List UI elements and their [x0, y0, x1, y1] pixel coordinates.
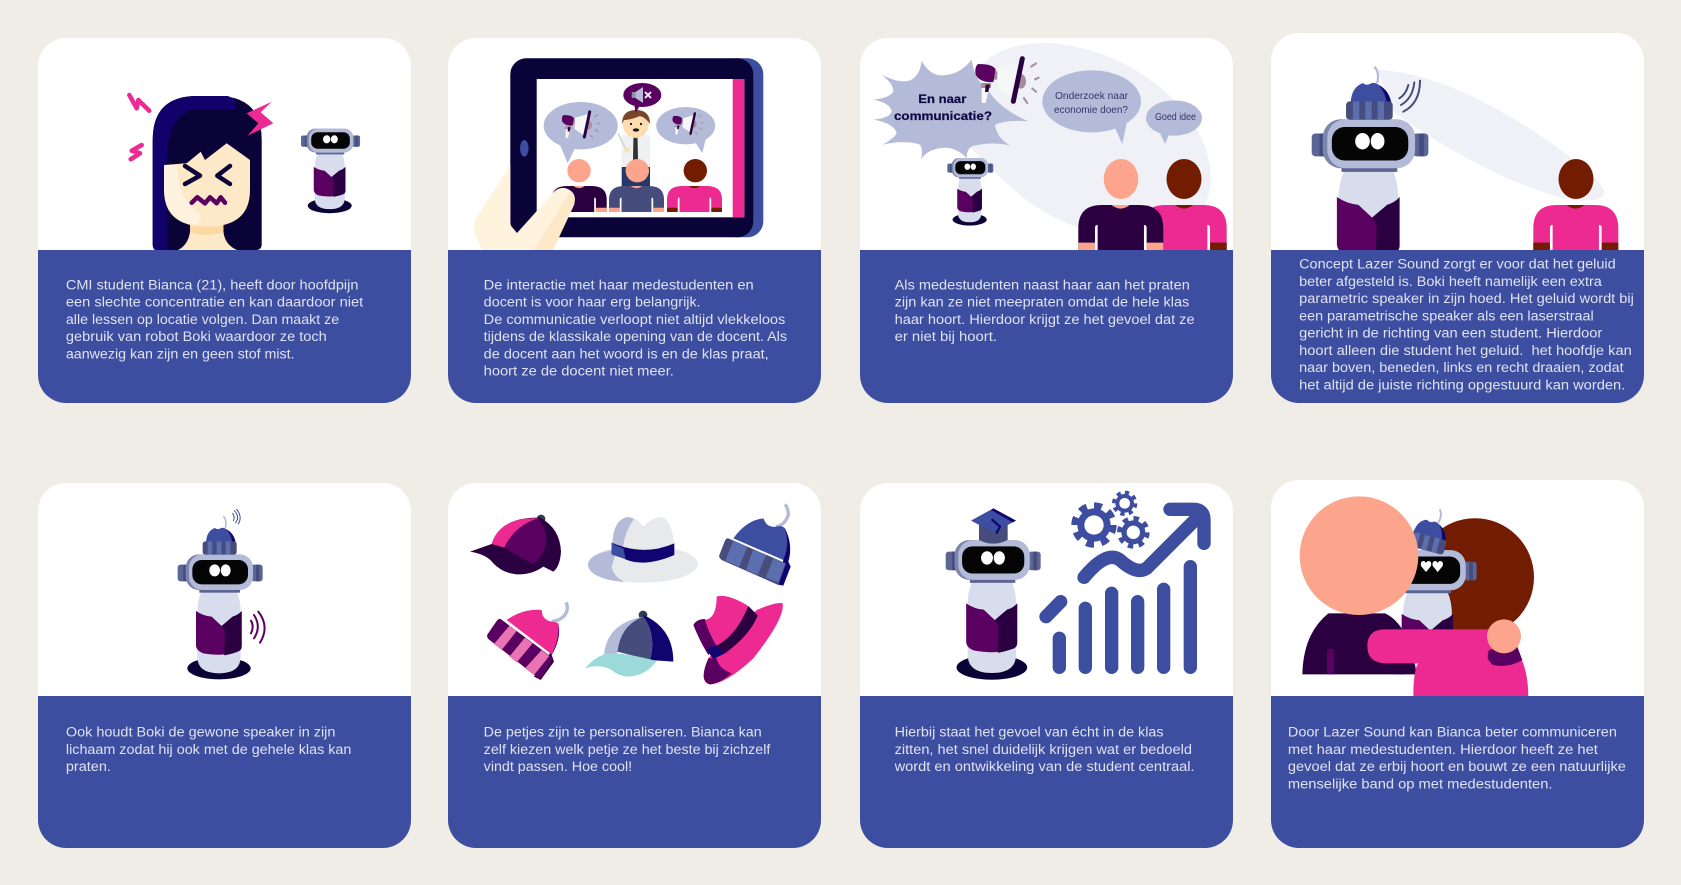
panel card: top	[38, 38, 411, 403]
text block	[894, 725, 1195, 775]
text block: wordt en ontwikkeling van de student centraal.	[894, 759, 1195, 775]
panel card: bottom band	[860, 696, 1233, 848]
students	[552, 186, 607, 212]
hat: white fedora	[588, 517, 698, 583]
icon: robot with beanie	[1312, 67, 1428, 291]
text block: menselijke band op met medestudenten.	[1288, 776, 1552, 792]
text block: met haar medestudenten. Hierdoor heeft ze het	[1288, 742, 1598, 758]
text block	[484, 277, 787, 380]
panel: development	[860, 483, 1233, 848]
text block: de docent aan het woord is en de klas praat,	[484, 346, 769, 362]
callout: burst text: communicatie?	[894, 109, 992, 123]
icon: gears	[1075, 493, 1147, 546]
student	[1533, 159, 1618, 250]
text block: docent is voor haar erg belangrijk.	[484, 294, 701, 310]
text block: De petjes zijn te personaliseren. Bianca kan	[484, 725, 762, 741]
callout: burst text	[894, 92, 992, 123]
illustration: conversation	[873, 43, 1227, 250]
text block: beter afgesteld is. Boki heeft namelijk een extra	[1299, 274, 1602, 290]
icon: robot	[947, 158, 993, 226]
icon: robot with heart eyes	[1381, 503, 1477, 691]
text block	[66, 277, 363, 362]
text block: Ook houdt Boki de gewone speaker in zijn	[66, 725, 335, 741]
text block	[895, 277, 1195, 345]
text block: zijn kan ze niet meepraten omdat de hele klas	[895, 294, 1189, 310]
panel: Bianca with headache	[38, 38, 411, 403]
text block	[1299, 257, 1634, 393]
text block	[484, 725, 770, 775]
hand	[474, 165, 575, 250]
text block: parametric speaker in zijn hoed. Het geluid wordt bij	[1299, 291, 1634, 307]
hat: blue beanie	[719, 504, 791, 586]
panel card: bottom band	[1271, 696, 1644, 848]
text block: De communicatie verloopt niet altijd vlekkeloos	[484, 312, 785, 328]
panel card: top	[1271, 480, 1644, 848]
text block: hoort alleen die student het geluid. het hoofdje kan	[1299, 343, 1632, 359]
panel card: top	[448, 483, 821, 848]
text block: gevoel dat ze erbij hoort en bouwt ze een natuurlijke	[1288, 759, 1626, 775]
text block: Concept Lazer Sound zorgt er voor dat het geluid	[1299, 257, 1616, 273]
text block: haar hoort. Hierdoor krijgt ze het gevoel dat ze	[895, 312, 1195, 328]
panel card: top	[448, 38, 821, 403]
panel card: bottom band	[448, 696, 821, 848]
panel: Lazer Sound beam	[1271, 33, 1644, 403]
hat: pink wide brim	[693, 596, 783, 684]
text block: alle lessen op locatie volgen. Dan maakt ze	[66, 312, 339, 328]
text block: er niet bij hoort.	[895, 329, 997, 345]
text block: Als medestudenten naast haar aan het praten	[895, 277, 1190, 293]
muted speaker bubble	[623, 83, 661, 113]
panel card: top	[1271, 33, 1644, 403]
text block: CMI student Bianca (21), heeft door hoofdpijn	[66, 277, 358, 293]
illustration: Bianca	[129, 95, 273, 250]
illustration: directed sound beam	[1312, 67, 1618, 291]
text block: aanwezig kan zijn en geen stof mist.	[66, 346, 295, 362]
icon: graduate robot	[946, 508, 1041, 680]
hat: purple cap	[470, 515, 561, 574]
callout: burst text: En naar	[918, 92, 967, 106]
text block: De interactie met haar medestudenten en	[484, 277, 754, 293]
callout: bubble text: Onderzoek naar	[1055, 90, 1128, 102]
panel: human bond	[1271, 480, 1644, 848]
panel card: bottom band	[38, 696, 411, 848]
text block: lichaam zodat hij ook met de gehele klas kan	[66, 742, 351, 758]
panel card: bottom band	[860, 250, 1233, 403]
panel card: top	[860, 38, 1233, 403]
illustration: hug	[1300, 496, 1534, 697]
text block: een parametrische speaker als een laserstraal	[1299, 308, 1594, 324]
text block: hoort ze de docent niet meer.	[484, 364, 674, 380]
icon: robot with speaker waves	[178, 509, 265, 679]
panel card: bottom band	[1271, 250, 1644, 403]
text block: praten.	[66, 759, 111, 775]
panel: hats	[448, 483, 821, 848]
panel card: top	[38, 483, 411, 848]
text block: Hierbij staat het gevoel van écht in de klas	[895, 725, 1164, 741]
text block: vindt passen. Hoe cool!	[484, 759, 632, 775]
text block: gericht in de richting van een student. Hierdoor	[1299, 326, 1603, 342]
panel card: bottom band	[448, 250, 821, 403]
chart: growth bars and arrow	[1046, 493, 1204, 667]
illustration: tablet	[474, 58, 763, 250]
students	[1078, 159, 1227, 250]
text block: Door Lazer Sound kan Bianca beter communiceren	[1288, 725, 1617, 741]
callout: bubble text	[1054, 90, 1196, 123]
panel: regular speaker	[38, 483, 411, 848]
text block: gebruik van robot Boki waardoor ze toch	[66, 329, 327, 345]
panel card: bottom band	[38, 250, 411, 403]
text block: het altijd de juiste richting opgestuurd kan worden.	[1299, 377, 1625, 393]
text block: zelf kiezen welk petje ze het beste bij zichzelf	[484, 742, 770, 758]
icon: robot Boki	[301, 128, 360, 213]
panel: robot and chatting students	[860, 38, 1233, 403]
text block	[1288, 725, 1626, 792]
text block: naar boven, beneden, links en recht draaien, zodat	[1299, 360, 1624, 376]
callout: bubble text: Goed idee	[1155, 111, 1196, 123]
panel card: top	[860, 483, 1233, 848]
hat: pink beanie	[487, 602, 567, 680]
panel: tablet classroom	[448, 38, 821, 403]
hat: blue cap	[585, 611, 673, 677]
hats illustration	[470, 504, 791, 684]
callout: bubble text: economie doen?	[1054, 104, 1128, 116]
text block: tijdens de klassikale opening van de docent. Als	[484, 329, 787, 345]
teacher	[618, 110, 650, 192]
text block: een slechte concentratie en kan daardoor niet	[66, 294, 363, 310]
text block	[66, 725, 351, 775]
speech bubbles	[544, 102, 715, 163]
text block: zitten, het snel duidelijk krijgen wat er bedoeld	[895, 742, 1192, 758]
